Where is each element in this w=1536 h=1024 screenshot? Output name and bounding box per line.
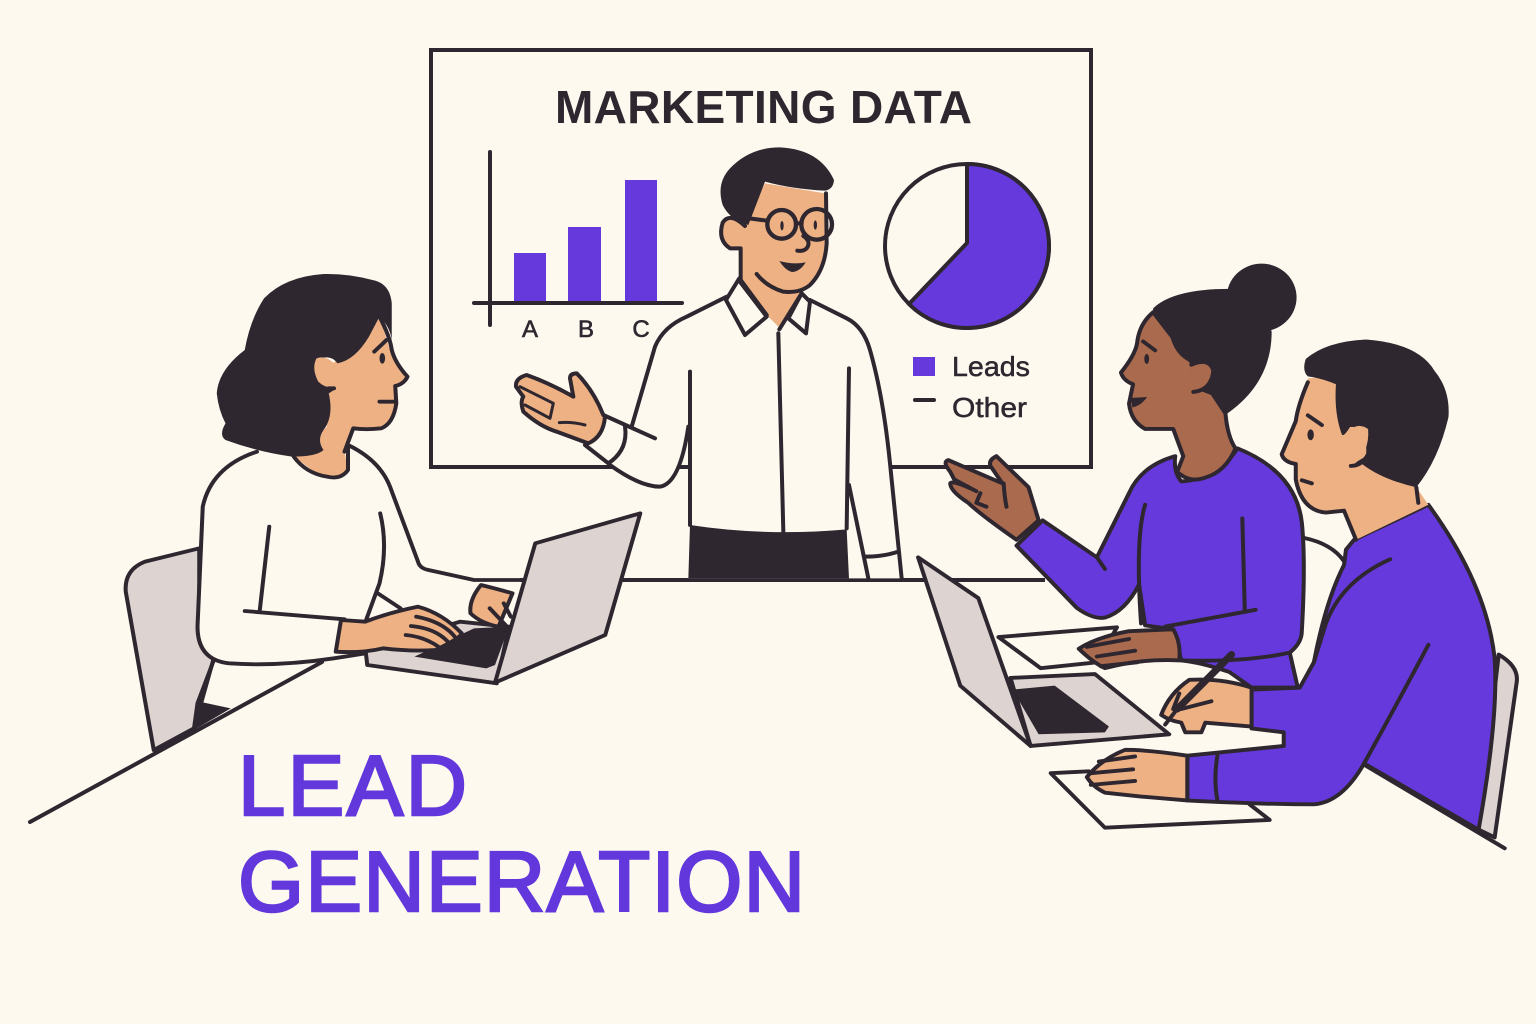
face and neck <box>294 317 408 477</box>
near hand <box>336 607 462 652</box>
bar chart <box>474 152 682 343</box>
legend: Other <box>952 392 1027 423</box>
laptop right <box>918 557 1169 746</box>
presenter face outline <box>741 193 827 329</box>
presenter collar <box>726 278 767 335</box>
table edge right <box>1362 763 1505 848</box>
presenter hair <box>721 147 834 225</box>
ear <box>314 357 334 388</box>
presenter ear <box>721 218 745 248</box>
woman eye and mouth <box>1131 341 1155 408</box>
man hair <box>1304 339 1449 487</box>
woman face and neck <box>1121 312 1236 480</box>
man face and neck <box>1282 374 1428 540</box>
woman lower hand <box>1079 629 1180 668</box>
man sweater lines <box>1215 559 1428 800</box>
legend: Leads <box>952 351 1030 382</box>
figure: woman at laptop, left <box>126 274 640 750</box>
bar chart: A <box>522 316 538 343</box>
paper under hand <box>998 627 1117 668</box>
eye, brow and mouth <box>329 340 395 402</box>
chair <box>126 548 213 750</box>
laptop keyboard <box>415 627 509 668</box>
man sweater <box>1187 505 1495 830</box>
woman raised hand <box>946 456 1039 540</box>
face outline <box>294 317 408 477</box>
man writing hand and pen <box>1161 655 1252 732</box>
title: lead generation: LEAD <box>238 739 467 834</box>
man lower hand <box>1087 750 1187 800</box>
lower body <box>194 702 231 730</box>
presenter shirt lines <box>585 297 902 578</box>
far hand <box>470 585 512 627</box>
paper under man hand <box>1051 771 1270 828</box>
figure: presenter <box>516 147 902 578</box>
heading: marketing data: MARKETING DATA <box>555 81 972 133</box>
woman sweater lines <box>1097 505 1290 661</box>
panel: whiteboard <box>431 50 1091 467</box>
presenter glasses <box>749 209 832 240</box>
woman sweater <box>1017 448 1304 688</box>
presenter trousers <box>688 525 849 578</box>
man face lines <box>1282 382 1418 540</box>
pie chart <box>885 164 1049 328</box>
figures: colleagues on the right <box>918 264 1517 848</box>
woman ear <box>1191 362 1213 392</box>
sweater lines <box>245 513 401 622</box>
legend <box>913 351 1030 423</box>
bar chart: C <box>632 316 650 343</box>
presenter nose and mouth <box>779 236 809 272</box>
title: lead generation <box>238 739 805 930</box>
man ear <box>1348 426 1368 466</box>
presenter hand <box>516 373 605 443</box>
sweater <box>198 445 520 664</box>
woman hair <box>1153 264 1297 413</box>
presenter face <box>740 183 827 327</box>
bar chart: B <box>578 316 594 343</box>
presenter shirt <box>585 297 902 578</box>
table edges <box>30 580 1045 822</box>
laptop base <box>366 622 509 683</box>
laptop screen <box>495 513 640 683</box>
chairs <box>1304 538 1517 837</box>
hair <box>217 274 392 457</box>
title: lead generation: GENERATION <box>238 835 805 930</box>
